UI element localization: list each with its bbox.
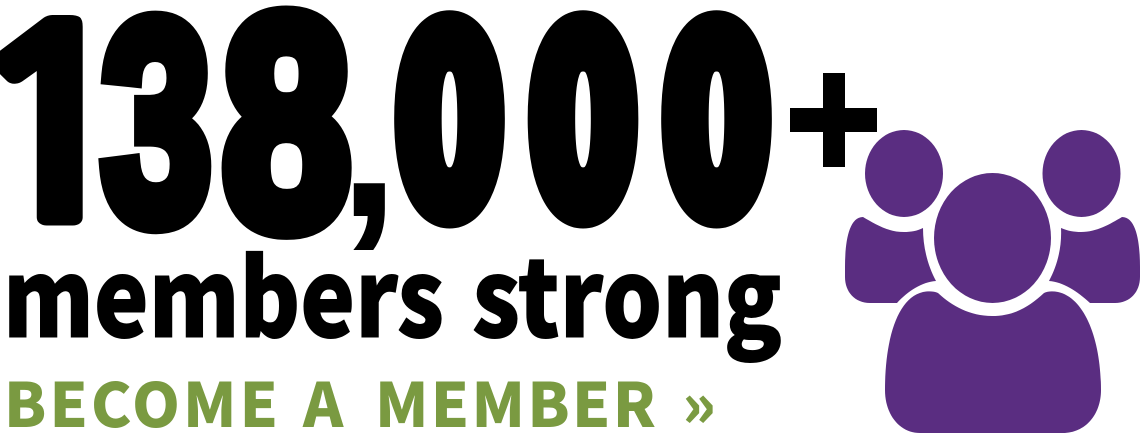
left person <box>845 130 943 303</box>
icon: group of people <box>845 130 1140 433</box>
subheading: members <box>3 213 444 368</box>
plus sign <box>790 73 877 167</box>
subheading: strong <box>472 213 782 368</box>
right person <box>1042 130 1140 303</box>
headline number <box>0 0 770 290</box>
headline number: , <box>338 17 400 263</box>
center person <box>885 173 1101 433</box>
subheading <box>3 213 782 368</box>
call to action link <box>4 356 716 435</box>
